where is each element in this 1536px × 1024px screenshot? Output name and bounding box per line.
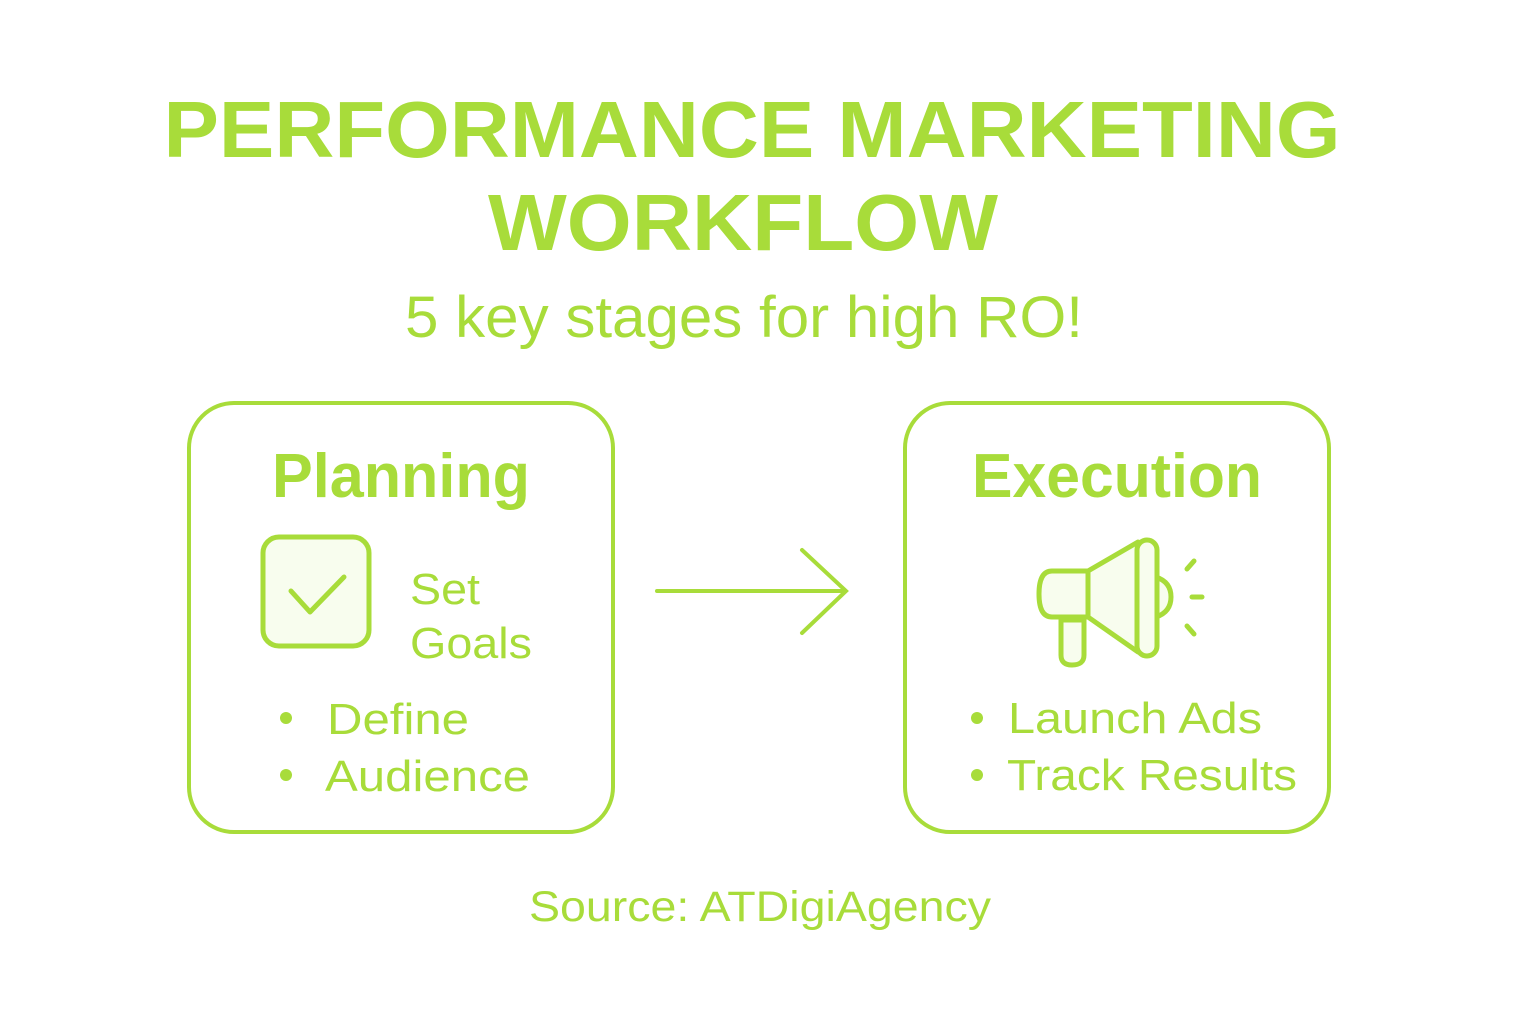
heading: planning: Planning <box>272 442 530 511</box>
icon: checkbox <box>263 537 369 646</box>
bullets: planning: Audience <box>325 752 530 801</box>
icon: megaphone <box>1039 540 1202 665</box>
bullets: planning <box>280 695 530 801</box>
heading: execution: Execution <box>972 442 1262 511</box>
title <box>164 85 1340 267</box>
panel: planning <box>189 403 613 832</box>
bullets: execution: Track Results <box>1007 751 1297 800</box>
text: set goals: Goals <box>410 619 532 668</box>
title: PERFORMANCE MARKETING <box>164 85 1340 174</box>
source: Source: ATDigiAgency <box>529 883 992 931</box>
text: set goals: Set <box>410 565 480 614</box>
title: WORKFLOW <box>488 178 999 267</box>
bullets: planning: Define <box>327 695 469 744</box>
bullets: execution: Launch Ads <box>1008 694 1262 743</box>
text: set goals <box>410 565 532 668</box>
panel: execution <box>905 403 1329 832</box>
subtitle: 5 key stages for high RO! <box>405 285 1083 350</box>
arrow <box>657 550 846 633</box>
bullets: execution <box>971 694 1297 800</box>
